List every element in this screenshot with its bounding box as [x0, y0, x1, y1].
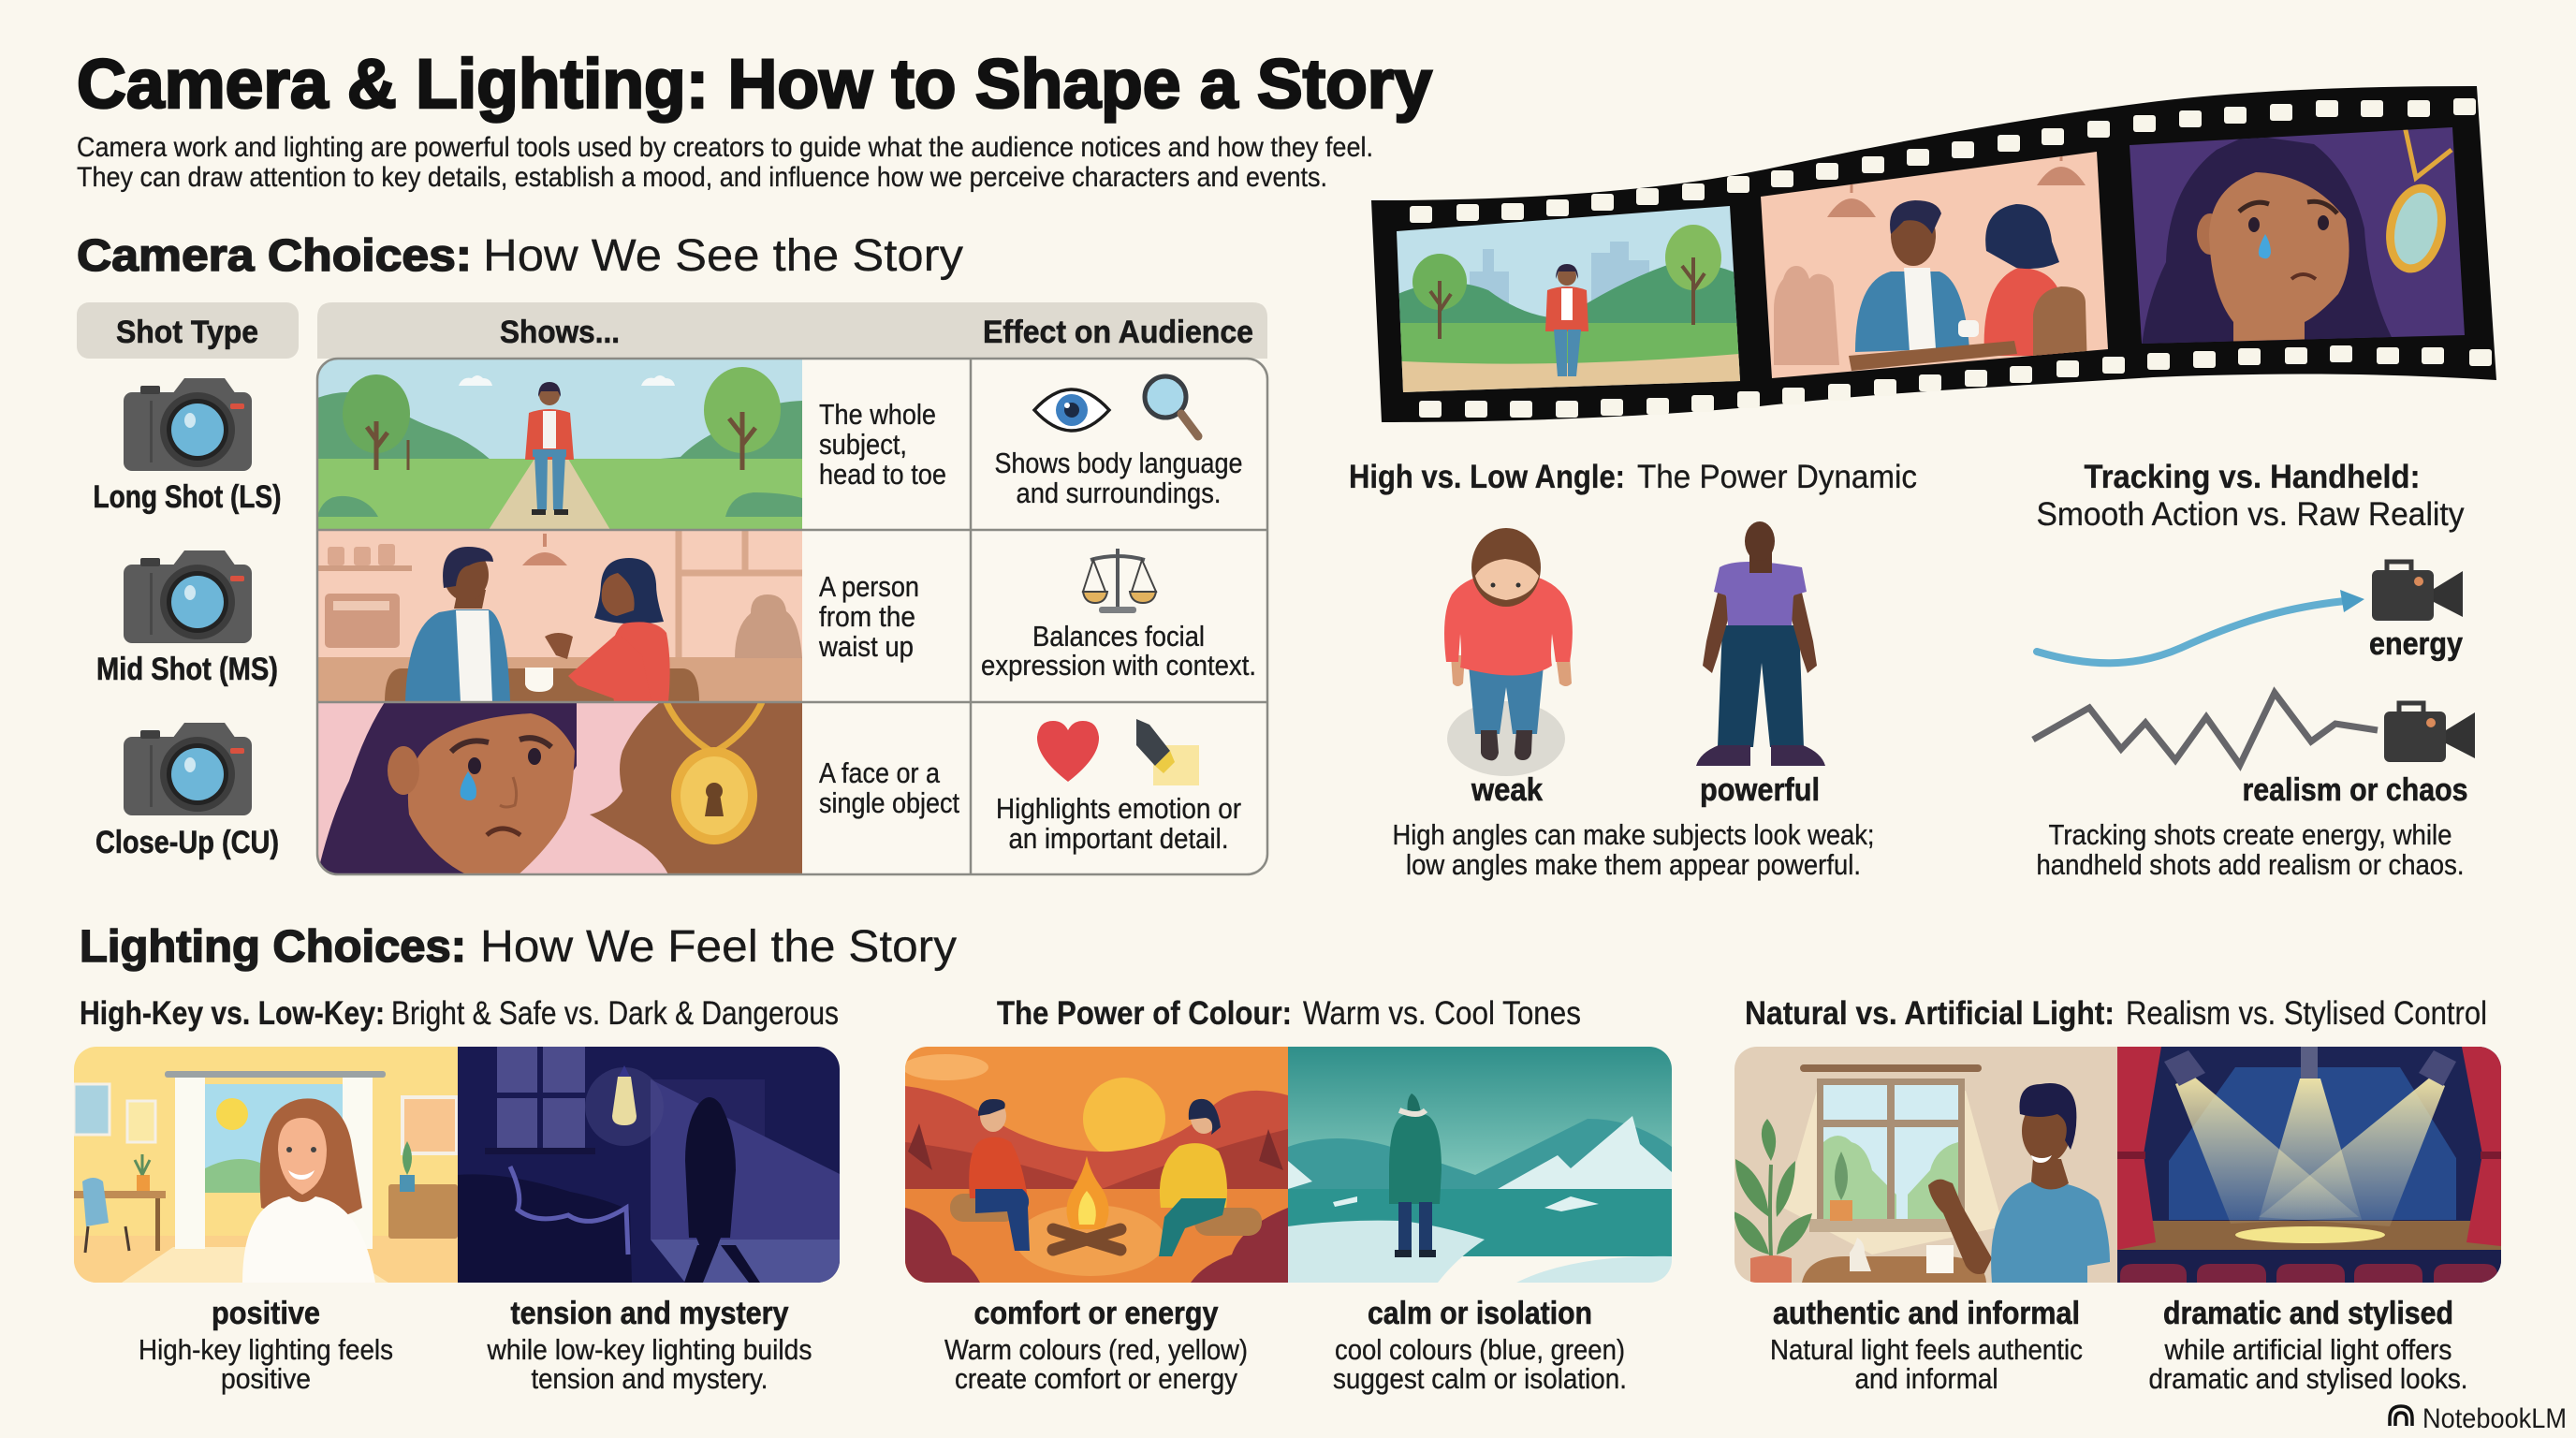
caption: authentic and informal: Natural light feels authentic — [1770, 1333, 2083, 1366]
icon: spotlight — [1136, 719, 1199, 785]
film frame: long shot — [1397, 206, 1740, 392]
row text: mid shot shows — [818, 570, 919, 663]
illustration: low-key night room — [458, 1047, 840, 1283]
subheading: high-key vs low-key: High-Key vs. Low-Key: — [80, 995, 385, 1032]
caption: calm or isolation — [1333, 1296, 1627, 1395]
row text: long shot shows: head to toe — [819, 458, 946, 491]
row text: mid shot shows: from the — [819, 600, 915, 633]
icon: heart — [1037, 721, 1099, 782]
heading: tracking vs handheld: Tracking vs. Handheld: — [2084, 459, 2421, 495]
heading: camera choices — [77, 231, 963, 281]
row text: mid shot shows: A person — [819, 570, 919, 603]
icon: tracking camera — [2372, 562, 2463, 621]
effect text: close-up: an important detail. — [1009, 822, 1228, 855]
subheading: power of colour: The Power of Colour: — [997, 995, 1292, 1032]
illustration: high-key room — [74, 1047, 458, 1283]
label: realism or chaos: realism or chaos — [2243, 772, 2467, 808]
caption: movement: Tracking shots create energy, while — [2048, 818, 2452, 851]
caption: comfort or energy — [944, 1296, 1248, 1395]
caption: angles — [1393, 818, 1874, 881]
caption: positive: positive — [212, 1296, 320, 1331]
caption: comfort or energy: Warm colours (red, yellow) — [944, 1333, 1248, 1366]
icon: eye — [1034, 389, 1109, 431]
caption: comfort or energy: create comfort or energy — [955, 1362, 1237, 1395]
subheading: power of colour: Warm vs. Cool Tones — [1303, 995, 1581, 1032]
illustration: cool arctic — [1288, 1047, 1672, 1283]
arrowhead — [2340, 590, 2364, 612]
film frame: close-up — [2130, 127, 2465, 344]
label: energy: energy — [2369, 626, 2463, 662]
caption: movement — [2037, 818, 2464, 881]
subheading: power of colour — [997, 995, 1581, 1032]
caption: dramatic and stylised: dramatic and stylised — [2163, 1296, 2453, 1331]
illustration: close-up face and locket — [317, 702, 802, 874]
caption: calm or isolation: cool colours (blue, green) — [1335, 1333, 1625, 1366]
caption: positive — [139, 1296, 393, 1395]
effect text: long shot: and surroundings. — [1017, 477, 1221, 509]
table header: shows and effect: Effect on Audience — [983, 315, 1253, 350]
panel: natural and artificial — [1734, 1047, 2501, 1283]
subheading: high-key vs low-key — [80, 995, 839, 1032]
heading: camera choices: Camera Choices: — [77, 231, 472, 281]
caption: tension and mystery: tension and mystery. — [532, 1362, 768, 1395]
row text: long shot shows — [819, 398, 946, 491]
effect text: close-up — [996, 792, 1241, 855]
caption: angles: High angles can make subjects look weak; — [1393, 818, 1874, 851]
table header: shows and effect: Shows... — [500, 315, 620, 350]
illustration: long shot park — [317, 359, 802, 530]
intro text: Camera work and lighting are powerful tools used by creators to guide what the audience notices and how they feel. — [77, 132, 1373, 163]
row text: close-up shows: single object — [819, 786, 959, 819]
table header: shot type — [77, 302, 299, 359]
caption: tension and mystery — [487, 1296, 812, 1395]
subheading: natural vs artificial — [1745, 995, 2487, 1032]
illustration: mid shot cafe — [317, 530, 802, 702]
line: handheld zigzag — [2033, 693, 2378, 765]
caption: dramatic and stylised — [2149, 1296, 2467, 1395]
illustration: natural light room — [1734, 1047, 2117, 1283]
heading: lighting choices: Lighting Choices: — [80, 922, 466, 972]
row text: long shot shows: The whole — [819, 398, 936, 431]
row text: close-up shows — [819, 756, 959, 819]
labels: weak and powerful: weak — [1471, 772, 1543, 808]
heading: lighting choices — [80, 922, 957, 972]
row text: long shot shows: subject, — [819, 428, 907, 461]
row text: close-up shows: A face or a — [819, 756, 941, 789]
caption: tension and mystery: tension and mystery — [511, 1296, 789, 1331]
effect text: mid shot: expression with context. — [981, 649, 1256, 682]
icon: handheld camera — [2384, 703, 2475, 762]
table grid — [317, 359, 1267, 874]
caption: dramatic and stylised: while artificial light offers — [2164, 1333, 2452, 1366]
shot type: mid shot — [96, 550, 278, 687]
subheading: natural vs artificial: Realism vs. Stylised Control — [2126, 995, 2487, 1032]
panel: high-key and low-key — [74, 1047, 840, 1283]
table header: shows and effect — [317, 302, 1267, 359]
heading: high vs low angle: The Power Dynamic — [1637, 459, 1917, 495]
heading: camera choices: How We See the Story — [483, 231, 963, 281]
caption: tension and mystery: while low-key lighting builds — [487, 1333, 812, 1366]
arrow: smooth tracking path — [2037, 601, 2345, 663]
effect text: mid shot — [981, 620, 1256, 682]
table body — [317, 359, 1267, 874]
caption: positive: positive — [221, 1362, 311, 1395]
row text: mid shot shows: waist up — [818, 630, 914, 663]
film strip — [1371, 86, 2496, 422]
labels: weak and powerful: powerful — [1700, 772, 1820, 808]
film sprocket holes — [1410, 98, 2492, 418]
intro text — [77, 132, 1373, 193]
icon: balance scales — [1083, 549, 1156, 613]
heading: high vs low angle — [1349, 459, 1917, 495]
subheading: natural vs artificial: Natural vs. Artificial Light: — [1745, 995, 2115, 1032]
icon: magnifying glass — [1145, 376, 1198, 436]
caption: calm or isolation: calm or isolation — [1368, 1296, 1592, 1331]
title: Camera & Lighting: How to Shape a Story — [77, 45, 1432, 123]
heading: tracking vs handheld: Smooth Action vs. Raw Reality — [2037, 496, 2465, 533]
effect text: mid shot: Balances focial — [1032, 620, 1205, 653]
illustration: warm campfire — [902, 1047, 1288, 1283]
caption: authentic and informal: authentic and informal — [1773, 1296, 2080, 1331]
caption: authentic and informal — [1770, 1296, 2083, 1395]
intro text: They can draw attention to key details, establish a mood, and influence how we perceive characters and events. — [77, 162, 1327, 193]
caption: dramatic and stylised: dramatic and stylised looks. — [2149, 1362, 2467, 1395]
shot type: close-up — [95, 723, 279, 860]
illustration: artificial stage light — [2117, 1047, 2501, 1283]
table header: shot type: Shot Type — [116, 315, 258, 350]
shot type: close-up: Close-Up (CU) — [95, 825, 279, 860]
shot type: long shot: Long Shot (LS) — [94, 479, 281, 515]
labels: weak and powerful — [1471, 772, 1820, 808]
figure: weak high angle — [1444, 528, 1573, 776]
caption: authentic and informal: and informal — [1855, 1362, 1998, 1395]
heading: tracking vs handheld — [2037, 459, 2465, 533]
subheading: high-key vs low-key: Bright & Safe vs. Dark & Dangerous — [391, 995, 839, 1032]
effect text: long shot: Shows body language — [994, 447, 1243, 479]
caption: positive: High-key lighting feels — [139, 1333, 393, 1366]
caption: angles: low angles make them appear powerful. — [1406, 848, 1861, 881]
effect text: long shot — [994, 447, 1243, 509]
caption: movement: handheld shots add realism or chaos. — [2037, 848, 2464, 881]
figure: powerful low angle — [1696, 521, 1825, 766]
caption: comfort or energy: comfort or energy — [973, 1296, 1219, 1331]
shot type: mid shot: Mid Shot (MS) — [96, 652, 278, 687]
shot type: long shot — [94, 378, 281, 515]
heading: high vs low angle: High vs. Low Angle: — [1349, 459, 1625, 495]
film frame: mid shot — [1761, 152, 2108, 378]
caption: calm or isolation: suggest calm or isolation. — [1333, 1362, 1627, 1395]
effect text: close-up: Highlights emotion or — [996, 792, 1241, 825]
heading: lighting choices: How We Feel the Story — [480, 922, 957, 972]
panel: warm and cool — [902, 1047, 1672, 1283]
